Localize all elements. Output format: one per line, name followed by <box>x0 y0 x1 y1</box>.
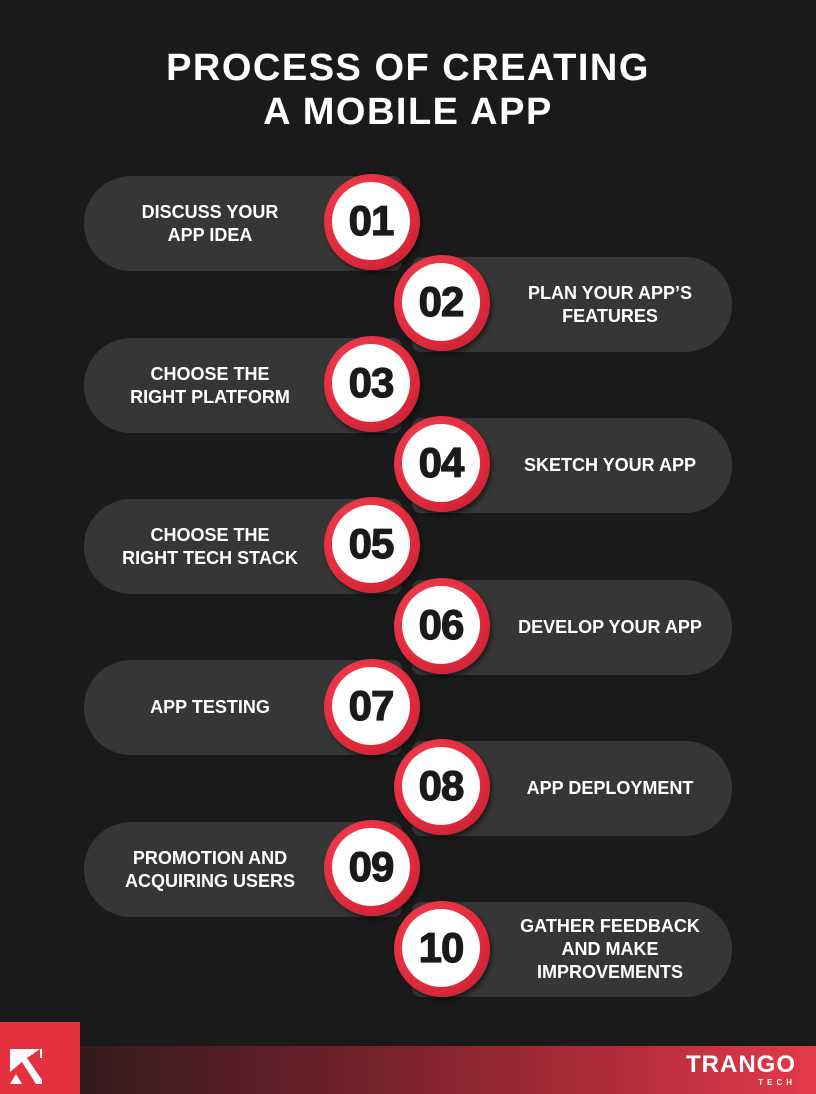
circle 09 <box>324 820 420 916</box>
step 09 <box>84 822 402 917</box>
step 07 <box>84 660 402 755</box>
circle 08: 08 <box>419 762 463 809</box>
circle 10: 10 <box>419 924 463 971</box>
step 06 <box>412 580 732 675</box>
step 09: PROMOTION AND <box>133 848 287 868</box>
title: PROCESS OF CREATING <box>166 47 650 89</box>
circle 06: 06 <box>419 601 463 648</box>
step 04 <box>412 418 732 513</box>
step 08: APP DEPLOYMENT <box>527 778 693 798</box>
circle 02: 02 <box>419 278 463 325</box>
step 05 <box>84 499 402 594</box>
step 06: DEVELOP YOUR APP <box>518 617 702 637</box>
circle 10 <box>394 901 490 997</box>
step 01: APP IDEA <box>168 224 252 244</box>
footer bar <box>0 1046 816 1094</box>
title <box>166 47 650 133</box>
circle 02 <box>394 255 490 351</box>
circle 06 <box>394 578 490 674</box>
step 07: APP TESTING <box>150 697 270 717</box>
step 02: FEATURES <box>562 306 658 326</box>
step 10: AND MAKE <box>562 939 658 959</box>
circle 05: 05 <box>349 520 393 567</box>
step 08 <box>412 741 732 836</box>
step 09: ACQUIRING USERS <box>125 870 295 890</box>
step 03: CHOOSE THE <box>150 364 270 384</box>
circle 01 <box>324 174 420 270</box>
circle 04: 04 <box>419 439 463 486</box>
circle 03: 03 <box>349 359 393 406</box>
circle 04 <box>394 416 490 512</box>
step 04: SKETCH YOUR APP <box>524 455 696 475</box>
circle 03 <box>324 336 420 432</box>
step 02: PLAN YOUR APP’S <box>528 282 692 302</box>
step 10 <box>412 902 732 997</box>
step 10: IMPROVEMENTS <box>537 962 683 982</box>
logo icon <box>0 1022 80 1094</box>
circle 09: 09 <box>349 843 393 890</box>
circle 07 <box>324 659 420 755</box>
circle 01: 01 <box>349 197 393 244</box>
brand logo: TRANGO <box>686 1051 796 1078</box>
step 05: CHOOSE THE <box>150 524 270 544</box>
step 01 <box>84 176 402 271</box>
circle 07: 07 <box>349 682 393 729</box>
step 05: RIGHT TECH STACK <box>122 548 298 568</box>
step 01: DISCUSS YOUR <box>142 202 278 222</box>
step 03: RIGHT PLATFORM <box>130 386 290 406</box>
circle 08 <box>394 739 490 835</box>
step 10: GATHER FEEDBACK <box>520 916 700 936</box>
step 02 <box>412 257 732 352</box>
brand logo: TECH <box>758 1078 796 1087</box>
title: A MOBILE APP <box>263 91 553 133</box>
step 03 <box>84 338 402 433</box>
circle 05 <box>324 497 420 593</box>
